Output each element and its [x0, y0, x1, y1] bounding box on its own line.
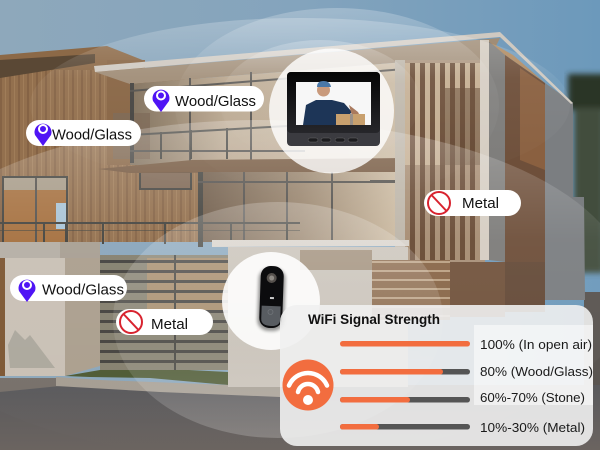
bar: 80% wood/glass: [340, 365, 593, 379]
ground behind right edge: [584, 292, 600, 387]
bar: 10-30% metal: [340, 421, 585, 435]
gate: [100, 255, 228, 370]
monitor buttons: [308, 138, 358, 142]
label: metal upper: Metal: [462, 196, 499, 212]
house: right side walls: [450, 32, 585, 317]
right pillar and entry: [212, 240, 450, 387]
video doorbell: [257, 266, 286, 331]
label: wood/glass lower: [10, 275, 127, 302]
wifi coverage ellipse: large upper: [30, 18, 570, 192]
ground: road: [0, 385, 600, 450]
tree behind house: [568, 74, 600, 273]
wifi coverage ellipse: upper outer: [175, 8, 499, 202]
house: left wood volume: [0, 46, 200, 247]
bar: 100% open air: [340, 338, 592, 352]
label: wood/glass left: Wood/Glass: [52, 128, 132, 144]
indoor monitor: [287, 72, 380, 146]
circle behind doorbell: [222, 252, 320, 350]
wifi coverage ellipse: large lower: [0, 120, 600, 450]
panel heading: WiFi Signal Strength: [308, 312, 440, 327]
label: metal lower: [116, 309, 213, 335]
house: balcony slab: [98, 158, 405, 173]
house: roof underside: [95, 38, 500, 84]
house: balcony railing: [0, 124, 305, 244]
monitor screen: delivery man: [303, 81, 365, 125]
wifi coverage ellipse: lower: [113, 202, 443, 438]
left pillar: [0, 242, 100, 376]
label: wood/glass lower: Wood/Glass: [42, 282, 124, 298]
house: upper floor roof: [94, 32, 500, 72]
label: metal lower: Metal: [151, 317, 188, 333]
house: upper floor glazing: [113, 62, 405, 165]
bar: 60-70% stone: [340, 391, 585, 405]
label: wood/glass upper: Wood/Glass: [175, 94, 256, 110]
icon: wifi badge: [282, 360, 334, 410]
label: wood/glass upper: [144, 86, 264, 112]
bar: 60-70% stone: 60%-70% (Stone): [480, 391, 585, 405]
bar: 10-30% metal: 10%-30% (Metal): [480, 421, 585, 435]
house: vertical slat section: [395, 40, 489, 265]
ground: pavement and grass: [0, 368, 280, 397]
label: metal upper: [424, 190, 521, 216]
wifi coverage ellipse: upper inner: [220, 40, 420, 164]
label: wood/glass left: [26, 120, 141, 146]
panel: wifi signal strength: [280, 305, 593, 446]
house: lower floor glazing: [198, 172, 405, 247]
bar: 100% open air: 100% (In open air): [480, 338, 592, 352]
bar: 80% wood/glass: 80% (Wood/Glass): [480, 365, 593, 379]
circle behind monitor: [269, 48, 394, 174]
